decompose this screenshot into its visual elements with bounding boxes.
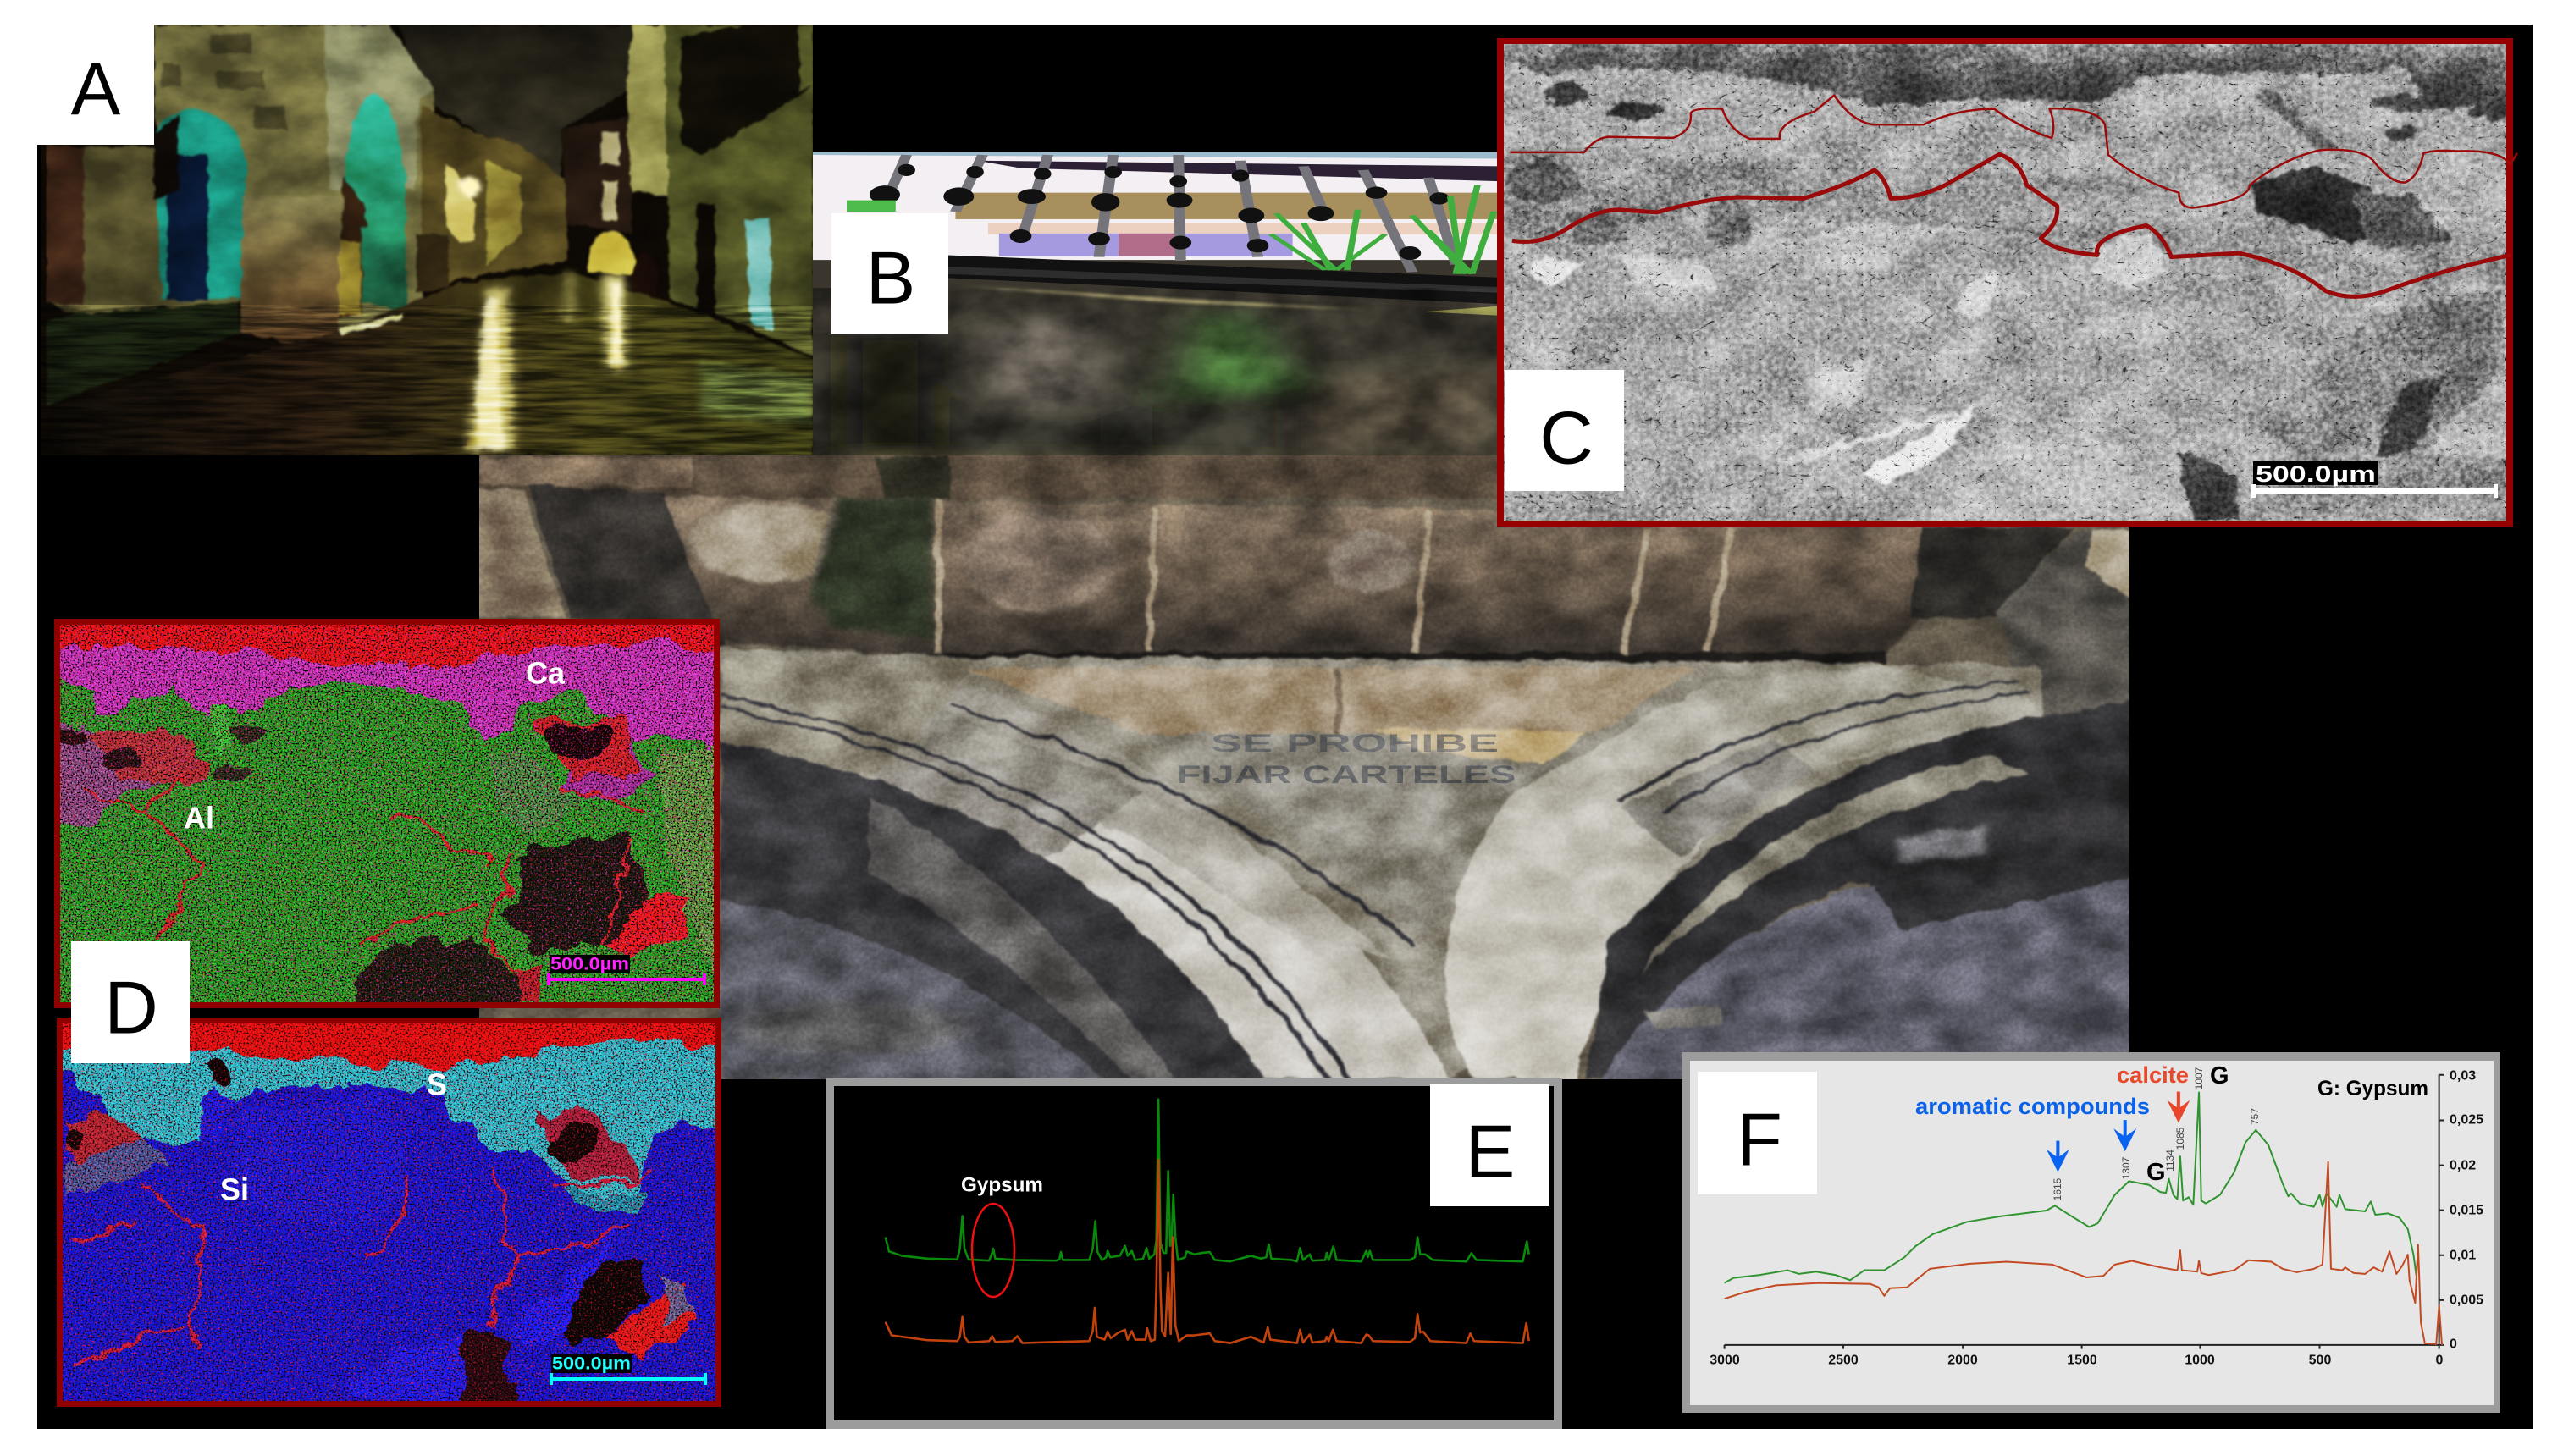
peak labels: 1307 [2120,1156,2132,1179]
x axis labels: 1500 [2067,1353,2097,1368]
label C: C [1539,396,1594,479]
peak labels: 1134 [2164,1150,2176,1172]
cyan scale bar [550,1354,707,1385]
annotation: G upper: G [2210,1062,2229,1089]
panel A: rainy street at night photo [41,25,814,455]
y axis labels: 0,025 [2450,1112,2483,1128]
magenta scale bar [547,955,706,985]
label E [1430,1084,1549,1206]
ferns [1271,185,1494,274]
peak labels: 1615 [2052,1177,2063,1200]
element label: Si: Si [220,1172,249,1207]
panel E: spectra on black [826,1078,1562,1429]
x axis labels: 1000 [2185,1353,2215,1368]
x axis labels: 2000 [1947,1353,1978,1368]
arrow: aromatic 1307 [2113,1120,2136,1151]
gypsum ring [972,1204,1014,1297]
cyan scale bar: 500.0µm [552,1354,631,1373]
label E: E [1466,1109,1515,1194]
label B: B [866,235,915,320]
element label: Al: Al [184,801,214,835]
peak labels [2052,1067,2261,1200]
y axis labels: 0,02 [2450,1158,2476,1173]
wet street texture [41,305,813,455]
element label: S: S [427,1067,447,1102]
panel F: Raman spectrum chart [1682,1052,2500,1413]
x axis labels: 3000 [1710,1353,1740,1368]
label A [37,25,154,145]
x axis labels [1710,1353,2444,1368]
red boundary lines [1510,95,2517,296]
legend: G Gypsum: G: Gypsum [2317,1077,2428,1100]
left arch stonework [860,683,1450,1078]
y axis labels [2450,1068,2483,1351]
label C [1505,370,1624,491]
label D: D [104,965,158,1050]
panel D bottom: S and Si element map [48,1000,729,1407]
label A: A [71,47,121,130]
panel C: SEM cross-section image [1497,38,2517,527]
annotation: calcite: calcite [2117,1062,2189,1088]
arrow: calcite [2167,1092,2190,1123]
y axis labels: 0,005 [2450,1293,2483,1307]
peak labels: 1007 [2193,1067,2205,1089]
x axis labels: 500 [2309,1353,2331,1368]
label B [831,213,948,334]
orange spectrum [886,1160,1529,1343]
right dark mass [1587,700,2137,1080]
x axis labels: 0 [2436,1353,2444,1368]
magenta scale bar: 500.0µm [550,955,629,973]
scale bar 500 µm [2251,461,2498,498]
label F: F [1737,1097,1782,1182]
panel central: stone arches photo [474,449,2137,1084]
faded inscription: SE PROHIBE [1211,730,1499,758]
x axis labels: 2500 [1828,1353,1859,1368]
orange curve [1725,1162,2442,1345]
y axis labels: 0,015 [2450,1204,2483,1217]
faded inscription [1179,734,1514,784]
gypsum label: Gypsum [961,1173,1043,1197]
panel B: balcony and stained wall photo [813,152,1497,455]
peak labels: 1085 [2174,1127,2186,1150]
y axis labels: 0,01 [2450,1248,2476,1263]
right arch stonework [1445,678,2040,1080]
element label: Ca: Ca [526,655,566,691]
faded inscription: FIJAR CARTELES [1177,761,1516,789]
scale bar 500 µm: 500.0µm [2256,461,2376,487]
y axis labels: 0,03 [2450,1068,2476,1084]
left dark intrados [721,743,1262,1080]
panel D top: Ca and Al element map [48,615,729,1011]
green curve [1725,1093,2417,1283]
label F [1698,1072,1817,1194]
arrow: aromatic 1615 [2047,1141,2069,1172]
annotation: aromatic compounds: aromatic compounds [1915,1094,2150,1119]
chart axes [1725,1075,2444,1349]
green spectrum [886,1100,1529,1261]
peak labels: 757 [2249,1108,2261,1125]
annotation: G lower: G [2146,1159,2166,1186]
label D [71,941,190,1063]
y axis labels: 0 [2450,1337,2457,1351]
